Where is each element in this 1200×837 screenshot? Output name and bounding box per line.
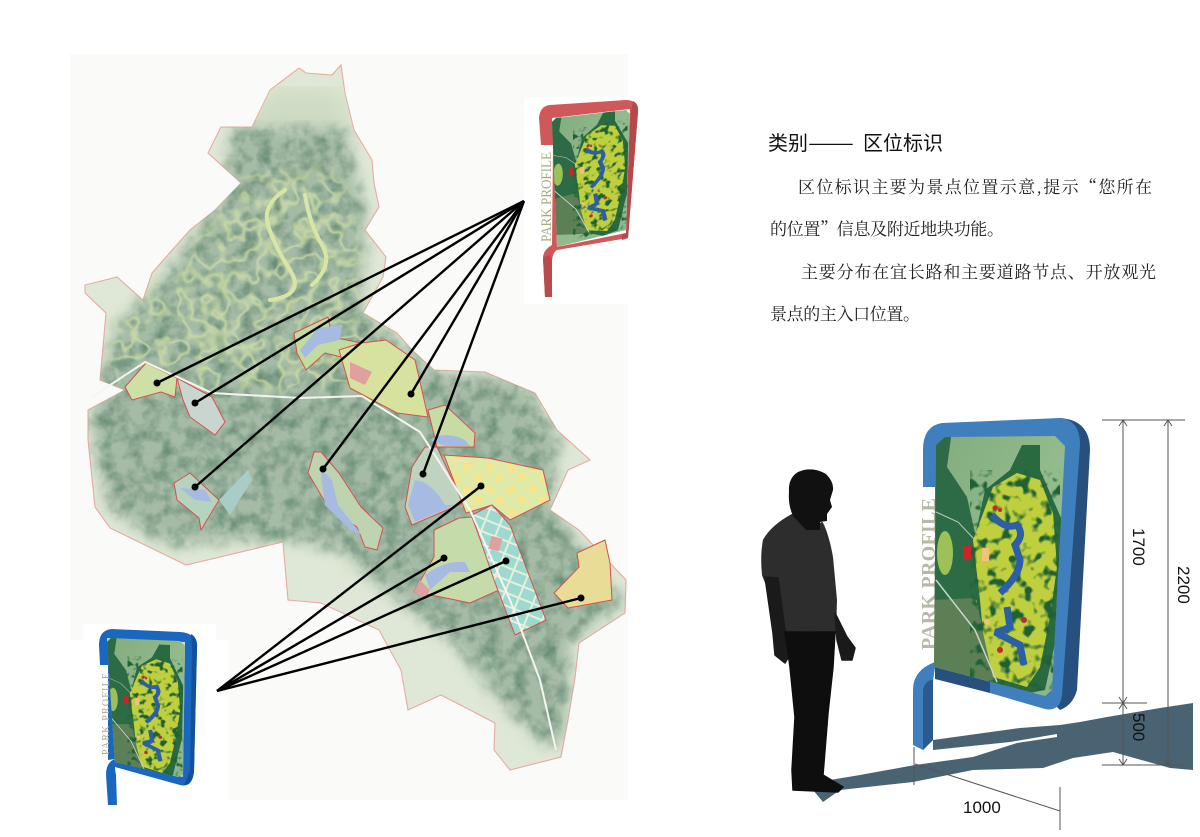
description text: 景点的主入口位置。 xyxy=(770,300,920,325)
dimension labels: 1000 xyxy=(963,798,1001,817)
trousers and shoes xyxy=(785,632,843,792)
description text: 主要分布在宜长路和主要道路节点、开放观光 xyxy=(801,258,1156,283)
leader lines from red sign xyxy=(154,201,524,490)
sign underside shadow xyxy=(935,667,990,693)
development parcels xyxy=(125,317,612,635)
sign frame xyxy=(913,418,1080,750)
sign map face xyxy=(934,436,1065,696)
head xyxy=(789,469,833,530)
forest relief xyxy=(70,90,628,760)
heading: 区位标识 xyxy=(863,127,943,156)
dimension lines xyxy=(914,420,1185,830)
blue sign xyxy=(98,629,197,805)
ground shadow xyxy=(813,703,1193,802)
blue sign: PARK PROFILE xyxy=(101,673,112,755)
large sign xyxy=(913,418,1090,750)
person silhouette xyxy=(762,469,855,792)
lakes in parcels xyxy=(180,325,470,590)
arms xyxy=(765,577,855,663)
map background panel xyxy=(70,54,628,800)
dimension labels: 2200 xyxy=(1174,566,1193,604)
red sign xyxy=(539,93,639,297)
inset: red sign background xyxy=(524,97,628,304)
shirt xyxy=(762,515,836,633)
leader lines from blue sign xyxy=(217,482,584,691)
valley corridors xyxy=(267,190,326,300)
sign rear edge xyxy=(1050,418,1090,710)
map region outline xyxy=(85,65,626,770)
dimension labels: 1700 xyxy=(1129,528,1148,566)
inset: blue sign background xyxy=(70,624,229,800)
heading: —— xyxy=(808,127,854,156)
dimension labels xyxy=(963,528,1193,817)
description text: 的位置”信息及附近地块功能。 xyxy=(770,215,1004,240)
description text: 区位标识主要为景点位置示意,提示“您所在 xyxy=(798,173,1152,198)
description text xyxy=(770,173,1156,325)
heading: 类别 xyxy=(768,127,808,156)
red sign: PARK PROFILE xyxy=(539,152,555,242)
sign post inner xyxy=(923,680,933,750)
sign text: PARK PROFILE xyxy=(918,498,940,650)
dimension labels: 500 xyxy=(1129,713,1148,741)
main road xyxy=(92,362,556,750)
red accents in parcels xyxy=(350,362,502,598)
site map xyxy=(70,65,628,770)
